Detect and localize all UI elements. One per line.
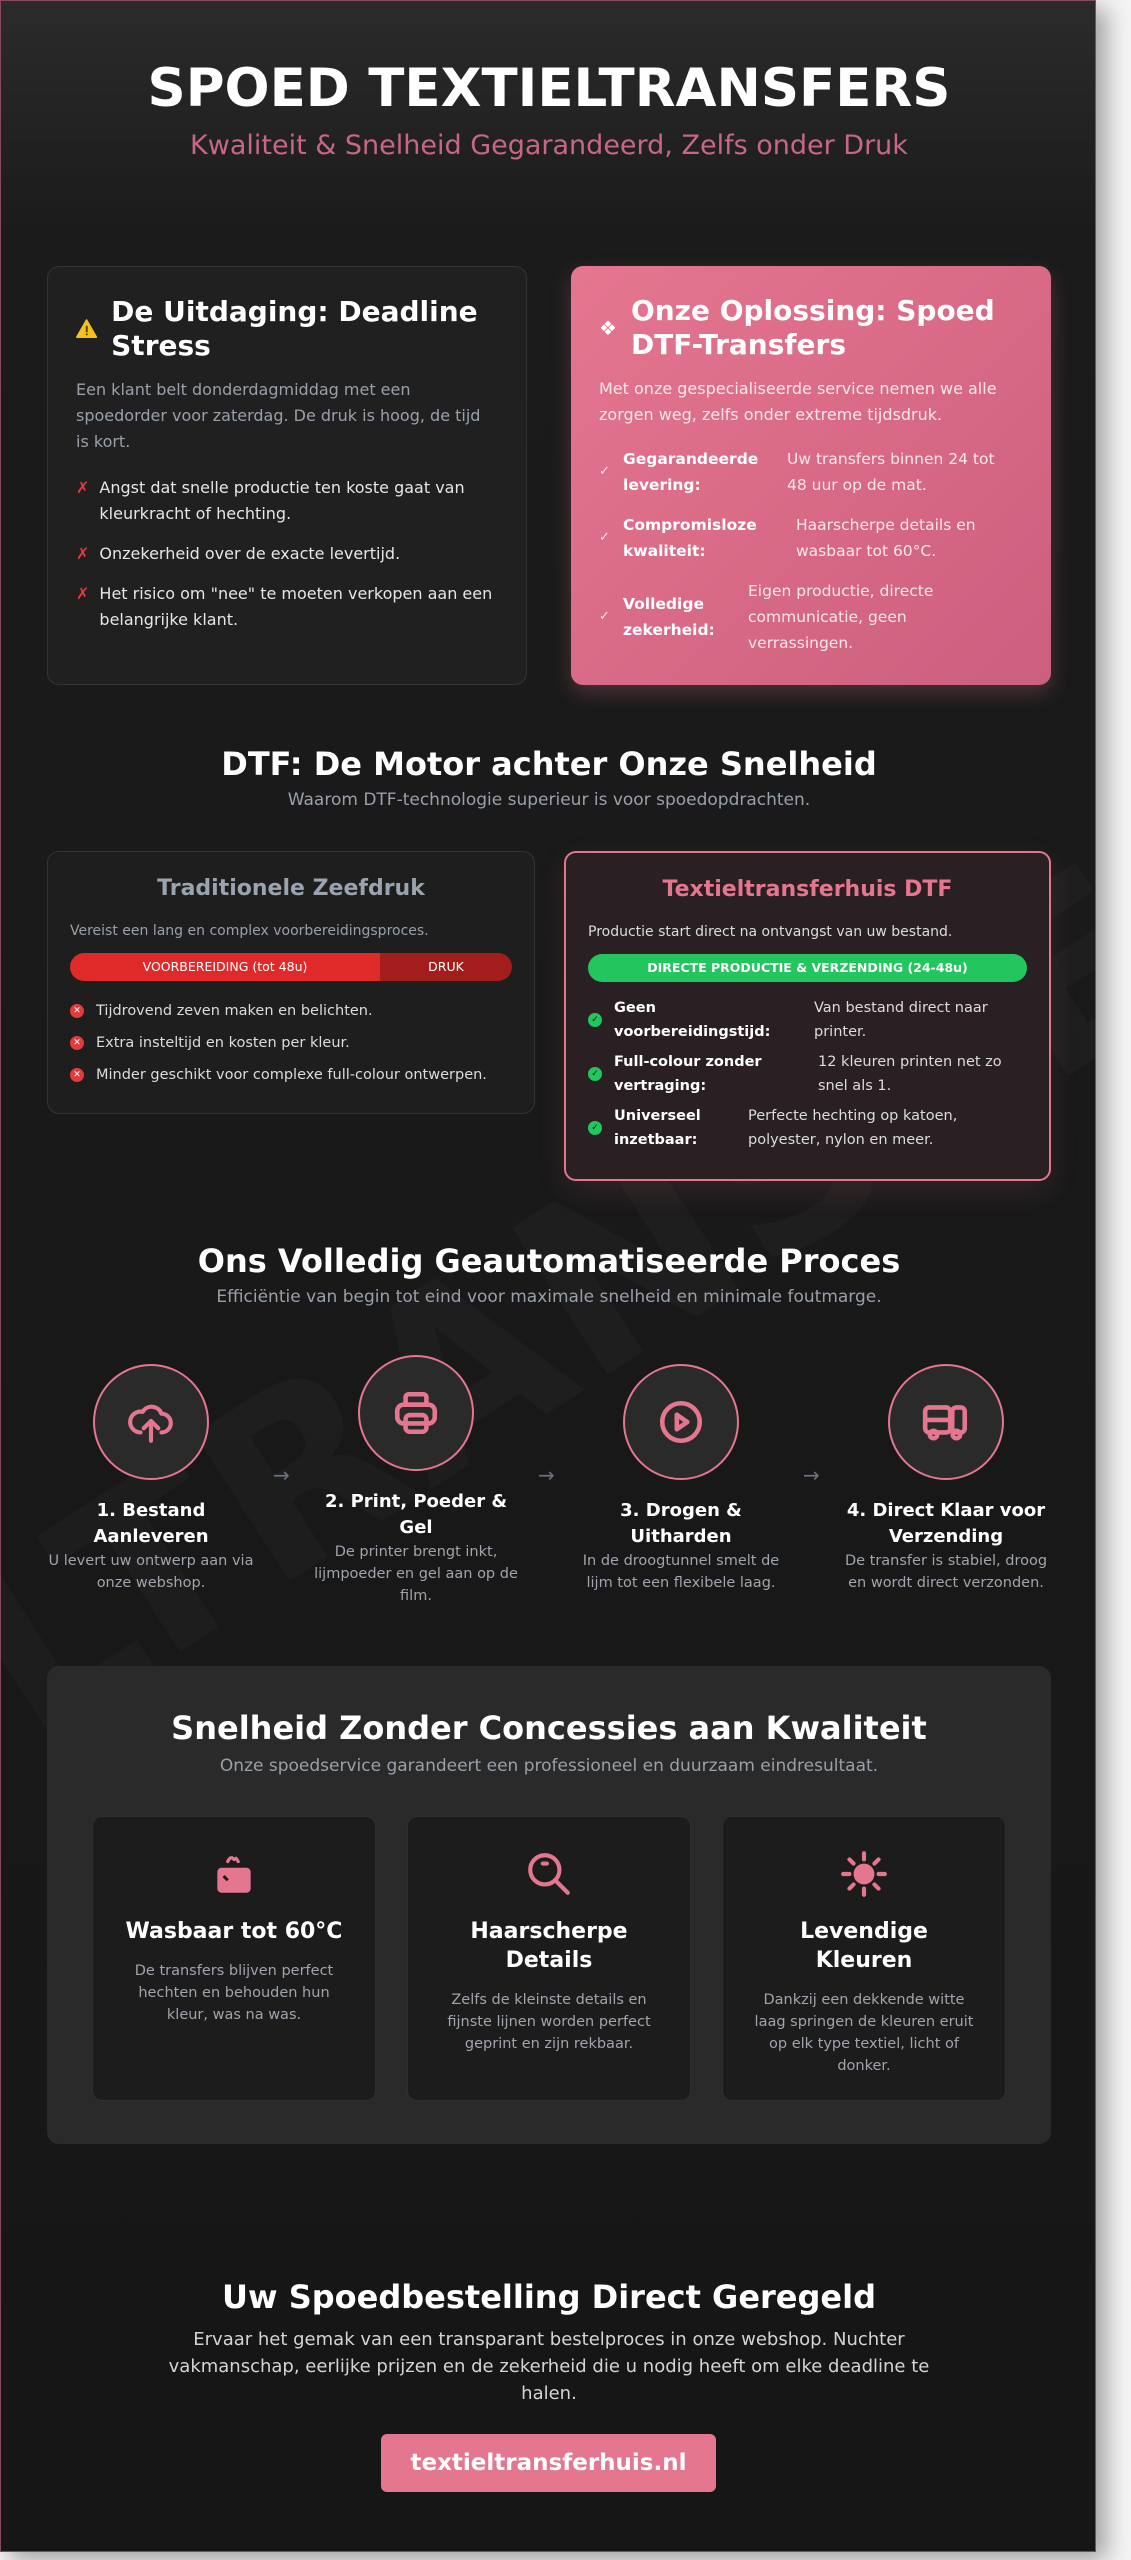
- icon: sun: [841, 1851, 887, 1897]
- list: fears: Onzekerheid over de exacte levertijd.: [99, 544, 400, 563]
- icon: printer: [358, 1355, 474, 1471]
- heading: Textieltransferhuis DTF: [663, 877, 952, 902]
- card: vivid colours: Levendige: [800, 1919, 928, 1944]
- list: fears: [76, 478, 492, 629]
- panel: solution: [571, 266, 1051, 685]
- title: SPOED TEXTIELTRANSFERS: [148, 58, 950, 119]
- list: drawbacks: ✕: [73, 1070, 81, 1080]
- list: benefits: ✓: [599, 530, 610, 545]
- panel: quality: [47, 1666, 1051, 2144]
- subtitle: quality: Onze spoedservice garandeert een professioneel en duurzaam eindresultaat.: [220, 1756, 878, 1776]
- list: benefits: Gegarandeerde levering:: [623, 450, 758, 494]
- bar: timeline: DRUK: [428, 959, 464, 974]
- list: benefits: ✓: [599, 609, 610, 624]
- text: intro: Met onze gespecialiseerde service nemen we alle zorgen weg, zelfs onder extreme tijdsdruk.: [599, 379, 997, 424]
- heading: challenge: De Uitdaging: Deadline Stress: [111, 295, 478, 362]
- bar: timeline: VOORBEREIDING (tot 48u): [143, 959, 307, 974]
- step 4: Verzending: [889, 1526, 1003, 1547]
- list: advantages: Van bestand direct naar printer.: [814, 1000, 988, 1040]
- step 4: De transfer is stabiel, droog en wordt direct verzonden.: [845, 1553, 1047, 1591]
- arrow: →: [803, 1463, 820, 1487]
- list: benefits: Compromisloze kwaliteit:: [623, 516, 757, 560]
- list: drawbacks: Minder geschikt voor complexe full-colour ontwerpen.: [96, 1067, 487, 1083]
- icon: magnifier: [528, 1853, 570, 1895]
- subtitle: Kwaliteit & Snelheid Gegarandeerd, Zelfs onder Druk: [190, 130, 908, 161]
- list: drawbacks: [70, 1003, 487, 1083]
- list: drawbacks: ✕: [73, 1038, 81, 1048]
- list: benefits: Haarscherpe details en wasbaar tot 60°C.: [796, 516, 976, 560]
- list: benefits: Uw transfers binnen 24 tot 48 uur op de mat.: [787, 450, 995, 494]
- list: advantages: Geen voorbereidingstijd:: [614, 1000, 770, 1040]
- list: benefits: [599, 450, 995, 652]
- list: fears: ✗: [76, 478, 89, 497]
- card: vivid colours: Dankzij een dekkende witte laag springen de kleuren eruit op elk type textiel, licht of donker.: [755, 1992, 973, 2074]
- card: sharp details: Details: [506, 1948, 592, 1973]
- step 4: [845, 1364, 1047, 1591]
- step 2: [314, 1355, 518, 1604]
- bar: direct production: DIRECTE PRODUCTIE & VERZENDING (24-48u): [647, 960, 968, 975]
- step 1: U levert uw ontwerp aan via onze webshop.: [49, 1553, 253, 1591]
- list: advantages: [588, 1000, 1002, 1148]
- text: CTA: Ervaar het gemak van een transparant bestelproces in onze webshop. Nuchter vakmanschap, eerlijke prijzen en de zekerheid die u nodig heeft om elke deadline te halen.: [169, 2329, 929, 2404]
- bar: direct production: [588, 954, 1027, 982]
- list: advantages: ✓: [591, 1123, 599, 1133]
- heading: CTA: Uw Spoedbestelling Direct Geregeld: [222, 2278, 876, 2316]
- step 1: [49, 1364, 253, 1591]
- list: fears: Angst dat snelle productie ten koste gaat van kleurkracht of hechting.: [99, 478, 465, 523]
- list: advantages: Full-colour zonder vertraging:: [614, 1054, 762, 1094]
- step 2: Gel: [399, 1517, 433, 1538]
- step 2: De printer brengt inkt, lijmpoeder en gel aan op de film.: [314, 1544, 518, 1604]
- step 3: [583, 1364, 779, 1591]
- step 4: 4. Direct Klaar voor: [847, 1500, 1045, 1521]
- step 3: Uitharden: [630, 1526, 732, 1547]
- list: drawbacks: Extra insteltijd en kosten per kleur.: [96, 1035, 350, 1051]
- list: fears: Het risico om "nee" te moeten verkopen aan een belangrijke klant.: [99, 584, 492, 629]
- list: drawbacks: ✕: [73, 1006, 81, 1016]
- subtitle: process: Efficiëntie van begin tot eind voor maximale snelheid en minimale foutmarge.: [216, 1287, 882, 1307]
- step 3: In de droogtunnel smelt de lijm tot een flexibele laag.: [583, 1553, 779, 1591]
- panel: traditional screen print: [47, 851, 535, 1114]
- heading: solution: Onze Oplossing: Spoed DTF-Transfers: [631, 294, 995, 361]
- subtitle: DTF section: Waarom DTF-technologie superieur is voor spoedopdrachten.: [288, 790, 810, 810]
- icon: play circle: [623, 1364, 739, 1480]
- step 2: 2. Print, Poeder &: [325, 1491, 507, 1512]
- text: scenario: Een klant belt donderdagmiddag met een spoedorder voor zaterdag. De druk is hoog, de tijd is kort.: [76, 380, 480, 451]
- card: vivid colours: Kleuren: [816, 1948, 912, 1973]
- list: fears: ✗: [76, 584, 89, 603]
- list: advantages: Universeel inzetbaar:: [614, 1108, 701, 1148]
- card: washable: Wasbaar tot 60°C: [126, 1919, 342, 1944]
- list: benefits: Volledige zekerheid:: [623, 595, 715, 639]
- arrow: →: [273, 1463, 290, 1487]
- card: sharp details: Haarscherpe: [470, 1919, 628, 1944]
- text: Vereist een lang en complex voorbereidingsproces.: [70, 923, 429, 939]
- card: sharp details: [407, 1816, 691, 2101]
- button: website: [381, 2434, 716, 2492]
- step 3: 3. Drogen &: [620, 1500, 742, 1521]
- heading: process: Ons Volledig Geautomatiseerde Proces: [198, 1242, 900, 1280]
- card: sharp details: Zelfs de kleinste details en fijnste lijnen worden perfect geprint en zijn rekbaar.: [447, 1992, 651, 2052]
- card: washable: De transfers blijven perfect hechten en behouden hun kleur, was na was.: [135, 1963, 333, 2023]
- button: website: textieltransferhuis.nl: [410, 2450, 686, 2476]
- bar: timeline: [70, 953, 512, 981]
- step 1: 1. Bestand: [97, 1500, 205, 1521]
- list: advantages: ✓: [591, 1015, 599, 1025]
- list: benefits: Eigen productie, directe communicatie, geen verrassingen.: [748, 582, 933, 652]
- icon: wash: [217, 1856, 251, 1893]
- heading: solution: ❖: [599, 316, 617, 340]
- list: advantages: 12 kleuren printen net zo snel als 1.: [818, 1054, 1002, 1094]
- step 1: Aanleveren: [93, 1526, 209, 1547]
- panel: DTF: [564, 851, 1051, 1181]
- list: fears: ✗: [76, 544, 89, 563]
- card: vivid colours: [722, 1816, 1006, 2101]
- icon: truck: [888, 1364, 1004, 1480]
- heading: DTF section: DTF: De Motor achter Onze Snelheid: [221, 745, 877, 783]
- list: drawbacks: Tijdrovend zeven maken en belichten.: [96, 1003, 373, 1019]
- card: washable: [92, 1816, 376, 2101]
- arrow: →: [538, 1463, 555, 1487]
- icon: cloud upload: [93, 1364, 209, 1480]
- heading: quality: Snelheid Zonder Concessies aan Kwaliteit: [171, 1709, 927, 1747]
- text: Productie start direct na ontvangst van uw bestand.: [588, 924, 952, 940]
- list: advantages: ✓: [591, 1069, 599, 1079]
- panel: challenge: [47, 266, 527, 685]
- heading: Traditionele Zeefdruk: [157, 876, 425, 901]
- list: benefits: ✓: [599, 464, 610, 479]
- list: advantages: Perfecte hechting op katoen, polyester, nylon en meer.: [748, 1108, 957, 1148]
